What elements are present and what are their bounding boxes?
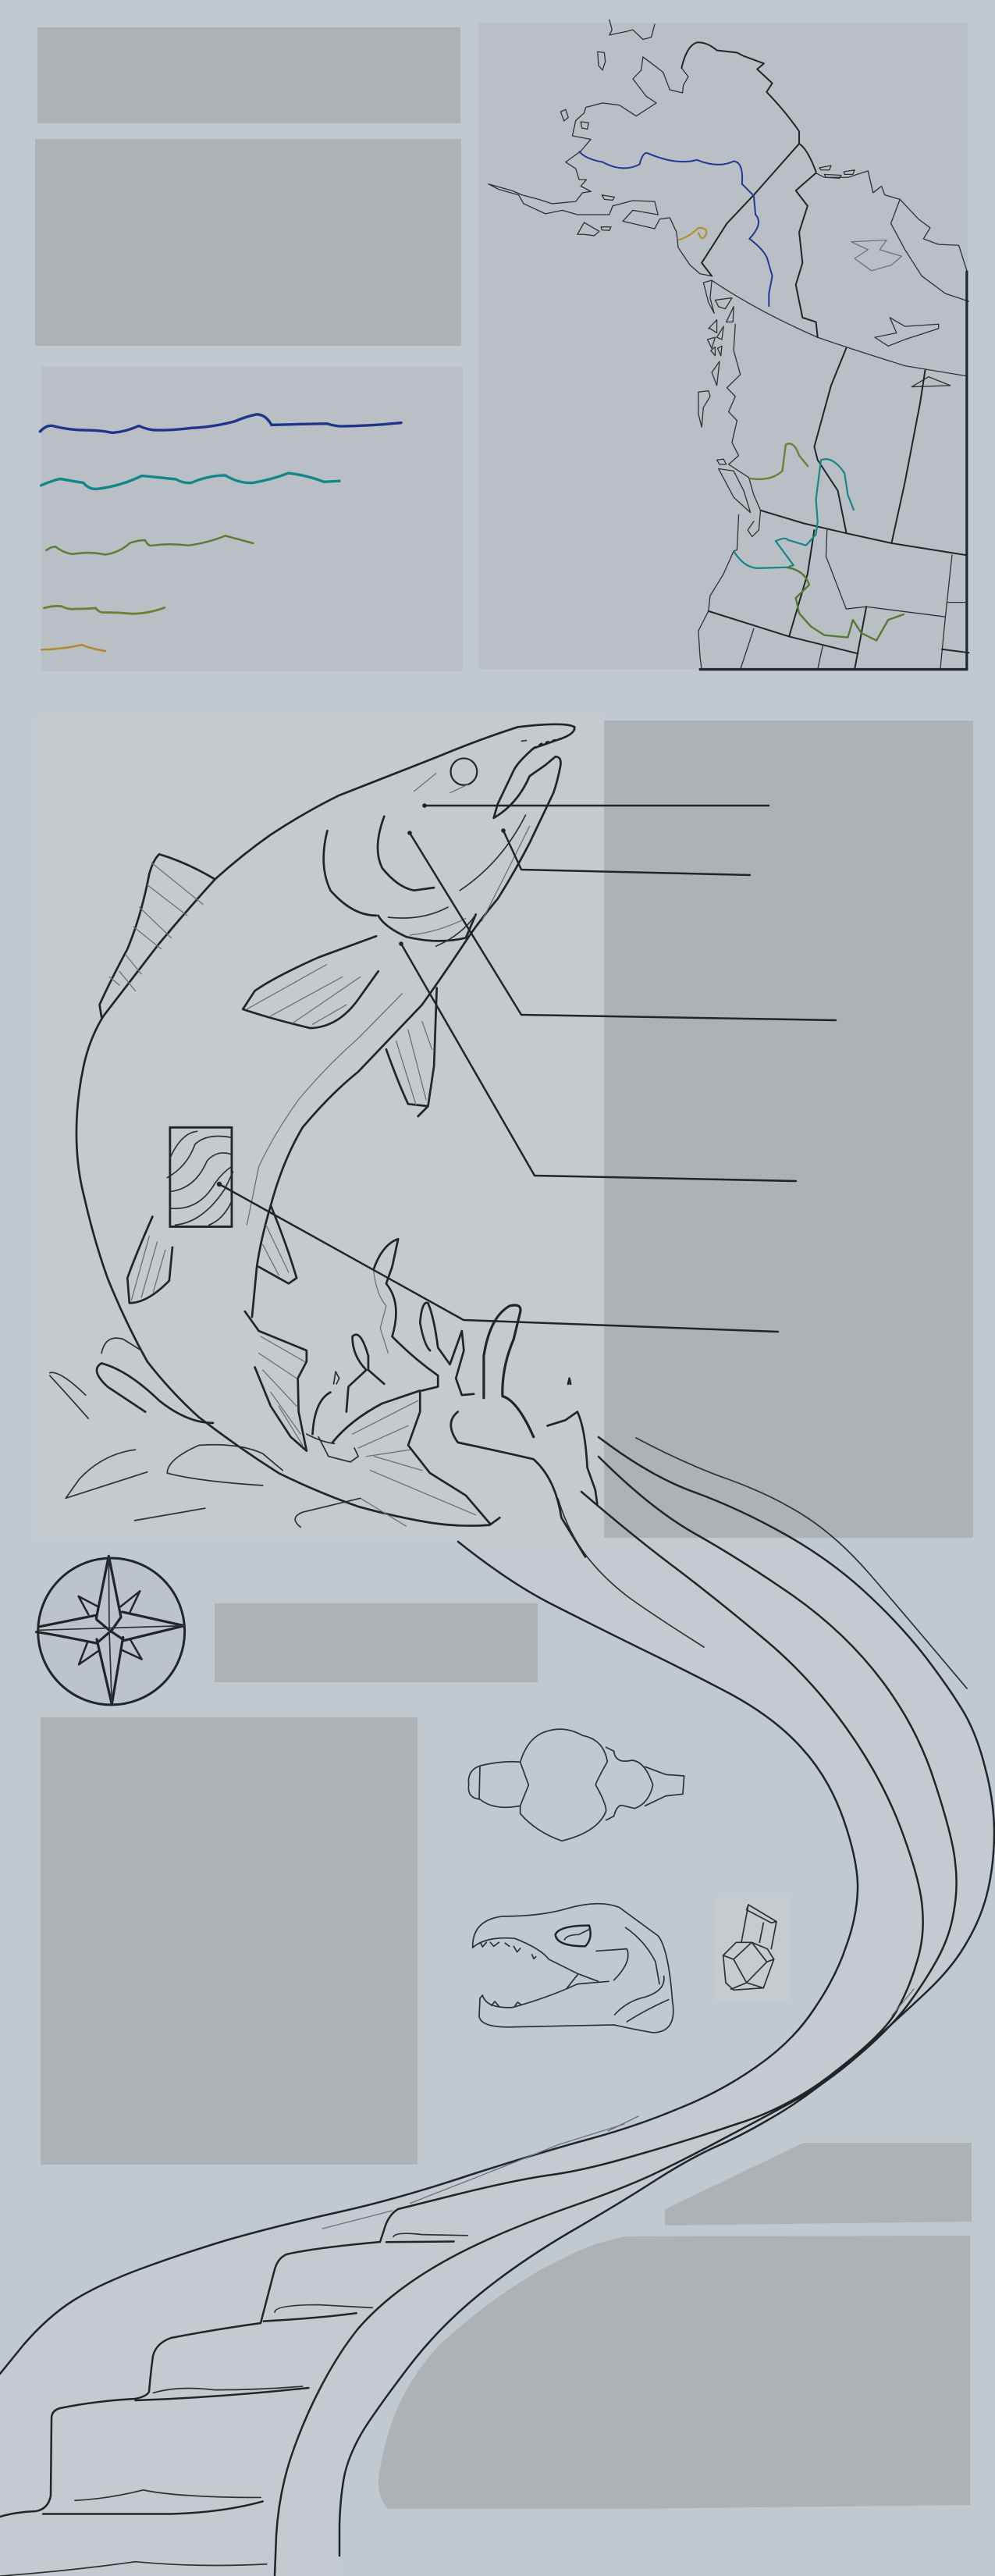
- panel: river length legend: [40, 367, 463, 671]
- anal fin: [259, 1205, 297, 1283]
- legend stroke: green river: [46, 535, 253, 554]
- fish body outline: [76, 724, 574, 1526]
- icon: compass: [37, 1556, 185, 1705]
- leader 1: [425, 805, 769, 806]
- legend stroke: teal river: [41, 473, 339, 489]
- leader 5: [219, 1184, 778, 1332]
- panel: anatomy text placeholder: [604, 720, 973, 1538]
- panel: compass caption placeholder: [215, 1603, 538, 1682]
- leader 4: [401, 944, 796, 1181]
- legend stroke: blue river: [40, 415, 401, 432]
- adipose fin: [127, 1217, 172, 1303]
- map river: gold: [678, 228, 706, 240]
- illustration: skull: [473, 1904, 673, 2033]
- panel: fish background: [36, 717, 606, 1540]
- map river: teal: [734, 459, 854, 568]
- scale inset: [167, 1127, 233, 1226]
- dorsal fin: [100, 854, 215, 1017]
- splash water lines: [50, 1239, 597, 1557]
- leader dots: [217, 803, 506, 1187]
- panel: intro text placeholder: [35, 139, 461, 346]
- upper jaw: [494, 727, 574, 818]
- icon: crystal: [723, 1905, 776, 1990]
- belly line: [252, 793, 553, 1317]
- panel: bottom right text placeholder: [378, 2236, 970, 2509]
- callout leader lines: [217, 803, 836, 1332]
- head details: [324, 738, 560, 946]
- leader 2: [503, 831, 750, 875]
- backdrop: crystal: [716, 1898, 790, 2001]
- river band fill: [0, 1437, 994, 2576]
- caudal fin: [332, 1390, 490, 1526]
- illustration: brain: [468, 1729, 684, 1841]
- legend stroke: gold river: [41, 645, 105, 651]
- backdrop: brain: [455, 1713, 734, 1856]
- ventral fin: [386, 988, 437, 1116]
- lower tail fin: [245, 1311, 307, 1451]
- panel: large text placeholder: [41, 1717, 418, 2165]
- map river: blue: [579, 151, 773, 307]
- panel: map of rivers: [478, 20, 968, 670]
- panel: title placeholder: [37, 27, 460, 123]
- backdrop: skull: [455, 1885, 691, 2069]
- legend stroke: olive river: [44, 606, 165, 614]
- map river: green: [786, 568, 904, 640]
- illustration: salmon: [50, 724, 597, 1557]
- eye: [451, 758, 477, 785]
- stair steps details: [0, 2124, 624, 2576]
- map outlines: [489, 20, 968, 670]
- lateral line: [247, 994, 402, 1225]
- leader 3: [410, 833, 836, 1020]
- river lines: [0, 1437, 994, 2576]
- map river: olive: [750, 443, 808, 479]
- panel: upper right callout placeholder: [665, 2143, 972, 2226]
- pectoral fin: [243, 936, 378, 1028]
